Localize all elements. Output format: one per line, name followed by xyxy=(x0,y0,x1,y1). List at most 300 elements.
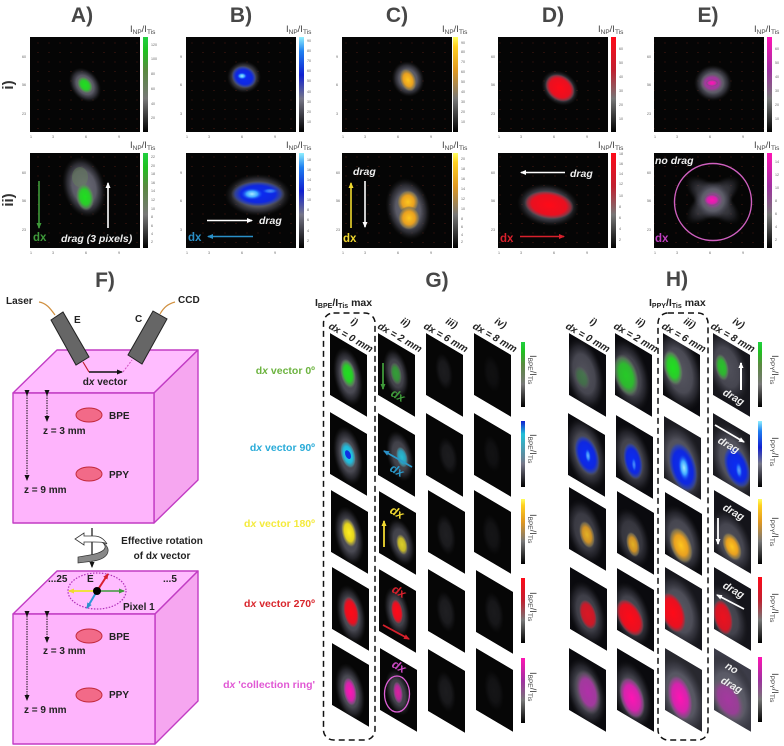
label: E: E xyxy=(87,574,94,585)
colorbar G red xyxy=(521,578,525,643)
axis labels: 1 xyxy=(342,251,344,255)
title: panel letter E: E) xyxy=(698,4,718,27)
row label i: i) xyxy=(0,80,17,90)
arrow: drag xyxy=(107,183,109,228)
map G ii 90 deg xyxy=(378,413,415,497)
axis labels: 9 xyxy=(274,251,276,255)
map H ii 90 deg xyxy=(616,415,653,499)
axis labels: 3 xyxy=(676,135,678,139)
axis labels: 1 xyxy=(186,251,188,255)
map G i 180 deg xyxy=(331,490,368,575)
column label H iii: dx = 6 mm xyxy=(660,321,708,355)
colorbar ticks: 20 xyxy=(619,103,623,107)
colorbar ticks: 14 xyxy=(307,178,311,182)
axis labels: 1 xyxy=(498,135,500,139)
blob: red dragged signal xyxy=(514,180,582,230)
axis labels: 1 xyxy=(342,135,344,139)
axis labels: 56 xyxy=(22,83,26,87)
colorbar ticks: 60 xyxy=(619,47,623,51)
colorbar xyxy=(453,37,458,132)
colorbar title H 1: Tis xyxy=(768,376,775,385)
axis labels: 9 xyxy=(586,251,588,255)
colorbar title G 5: Tis xyxy=(526,693,533,702)
column label G iv: iv) xyxy=(492,316,509,332)
map H iii 90 deg xyxy=(664,416,701,500)
colorbar ticks: 2 xyxy=(619,238,621,242)
axis labels: 9 xyxy=(336,55,338,59)
annotation: H iv 270 deg drag xyxy=(717,580,747,609)
annotation: H iv 90 deg drag: drag xyxy=(716,435,742,457)
map H i 90 deg xyxy=(568,413,605,497)
colorbar ticks: 4 xyxy=(775,225,777,229)
colorbar xyxy=(143,153,148,248)
label: drag: drag xyxy=(570,168,593,180)
annotation: H iv no drag xyxy=(719,660,745,697)
map H ii ring xyxy=(617,648,654,732)
colorbar ticks: 30 xyxy=(775,89,779,93)
axis labels: 60 xyxy=(22,55,26,59)
colorbar ticks: 90 xyxy=(461,41,465,45)
axis labels: 56 xyxy=(647,83,651,87)
column label H i: dx = 0 mm xyxy=(564,321,612,355)
map G ii 0 deg xyxy=(378,333,415,417)
label: dx: dx xyxy=(500,233,514,245)
blob: blue signal xyxy=(227,61,261,93)
colorbar ticks: 10 xyxy=(307,120,311,124)
colorbar title C ii: Tis xyxy=(459,145,468,152)
axis labels: 3 xyxy=(336,112,338,116)
label: dx: dx xyxy=(188,232,202,244)
colorbar ticks: 12 xyxy=(151,198,155,202)
colorbar title C ii: /I xyxy=(454,140,459,151)
panel: E ii heat map xyxy=(647,153,779,255)
colorbar title H 3: PPY xyxy=(768,520,775,533)
axis labels: 6 xyxy=(180,199,182,203)
axis labels: 3 xyxy=(52,251,54,255)
axis labels: 6 xyxy=(241,135,243,139)
colorbar title G 3: /I xyxy=(527,530,538,535)
annotation: G ii 90 deg dx xyxy=(384,451,412,481)
colorbar title H 1: PPY xyxy=(768,358,775,371)
axis labels: 9 xyxy=(430,135,432,139)
axis labels: 6 xyxy=(85,251,87,255)
colorbar title E i: Tis xyxy=(771,29,780,36)
axis labels xyxy=(491,171,588,255)
colorbar title D ii: NP xyxy=(601,145,610,152)
probe E xyxy=(51,312,89,365)
colorbar title H 3: /I xyxy=(769,533,780,538)
colorbar H magenta xyxy=(758,657,762,722)
map G iii 270 deg xyxy=(428,569,465,653)
heading: IPPY/ITis max: PPY xyxy=(652,303,666,310)
map H i 0 deg xyxy=(569,333,606,417)
axis labels: 56 xyxy=(336,199,340,203)
colorbar ticks: 20 xyxy=(461,110,465,114)
axis labels: 3 xyxy=(364,135,366,139)
colorbar ticks: 12 xyxy=(619,182,623,186)
axis labels: 23 xyxy=(22,112,26,116)
label: z = 3 mm: z = 3 mm xyxy=(43,426,86,437)
colorbar ticks: 30 xyxy=(461,100,465,104)
colorbar ticks: 6 xyxy=(461,225,463,229)
axis labels: 60 xyxy=(491,55,495,59)
nanoparticle: PPY xyxy=(76,467,102,481)
axis labels: 1 xyxy=(30,251,32,255)
blob: green dragged signal xyxy=(56,152,112,222)
arrow: drag xyxy=(207,220,252,222)
colorbar ticks: 20 xyxy=(307,110,311,114)
colorbar xyxy=(767,153,772,248)
arrow: dx xyxy=(38,181,40,228)
colorbar title G 5: I xyxy=(527,672,538,675)
label: Laser: Laser xyxy=(6,296,33,307)
colorbar ticks: 60 xyxy=(461,70,465,74)
arrow: dx xyxy=(350,183,352,228)
colorbar ticks: 6 xyxy=(619,216,621,220)
axis labels xyxy=(491,55,588,139)
colorbar title D ii: /I xyxy=(610,140,615,151)
annotation: G ii ring dx: dx xyxy=(389,657,410,677)
annotation: H iv 180 deg drag xyxy=(718,502,747,544)
axis labels: 6 xyxy=(553,135,555,139)
colorbar H red xyxy=(758,577,762,643)
axis labels xyxy=(336,171,432,255)
map G iv 0 deg xyxy=(474,333,511,417)
colorbar ticks: 20 xyxy=(775,103,779,107)
panel: D i heat map xyxy=(491,37,623,139)
map H ii 0 deg xyxy=(615,333,652,417)
panel: D ii heat map xyxy=(491,152,623,255)
depth arrow: z 3 mm xyxy=(46,395,48,421)
colorbar ticks: 90 xyxy=(307,39,311,43)
column label G iv: dx = 8 mm xyxy=(470,321,519,355)
colorbar title B ii: NP xyxy=(289,145,298,152)
colorbar title E i: /I xyxy=(766,24,771,35)
colorbar title A i: Tis xyxy=(147,29,156,36)
colorbar ticks: 12 xyxy=(775,173,779,177)
heading: IPPY/ITis max: max xyxy=(682,297,706,309)
colorbar title H 5: /I xyxy=(769,689,780,694)
axis labels: 1 xyxy=(498,251,500,255)
column label G i: i) xyxy=(348,316,360,329)
colorbar ticks xyxy=(307,158,311,243)
ray: laser path xyxy=(83,362,89,372)
axis labels: 56 xyxy=(647,199,651,203)
colorbar ticks: 4 xyxy=(307,229,309,233)
colorbar ticks: 8 xyxy=(461,217,463,221)
axis labels: 60 xyxy=(336,171,340,175)
title: panel letter B: B) xyxy=(230,4,252,27)
arrow: dx xyxy=(520,236,564,238)
colorbar ticks: 10 xyxy=(619,194,623,198)
colorbar ticks: 20 xyxy=(461,157,465,161)
axis labels: 9 xyxy=(430,251,432,255)
map H iii 270 deg xyxy=(665,567,702,651)
panel: C ii heat map xyxy=(336,153,465,255)
colorbar title B i: /I xyxy=(298,24,303,35)
map H iv 180 deg xyxy=(714,490,751,574)
annotation: G ii 90 deg dx: dx xyxy=(387,461,408,481)
map H iii ring xyxy=(665,648,702,732)
axis labels xyxy=(647,171,744,255)
colorbar ticks: 12 xyxy=(307,188,311,192)
annotation: H iv 270 deg drag: drag xyxy=(721,580,747,602)
panel F: experiment diagram xyxy=(6,269,203,744)
colorbar title D i: Tis xyxy=(615,29,624,36)
axis labels xyxy=(647,55,744,139)
colorbar title C i: Tis xyxy=(459,29,468,36)
annotation: H iv 0 deg drag xyxy=(721,363,747,409)
map G i 270 deg xyxy=(332,567,369,653)
pixel collection ring xyxy=(68,573,126,609)
axis labels: 3 xyxy=(520,251,522,255)
panel: C i heat map xyxy=(336,37,465,139)
nanoparticle: BPE xyxy=(76,629,102,643)
colorbar ticks: 8 xyxy=(619,205,621,209)
map G ii ring xyxy=(380,648,417,732)
colorbar ticks: 80 xyxy=(307,49,311,53)
title: panel letter C: C) xyxy=(386,4,408,27)
axis labels: 56 xyxy=(491,83,495,87)
label: dx vector: dx vector xyxy=(83,377,127,388)
colorbar title G 1: /I xyxy=(527,371,538,376)
axis labels: 3 xyxy=(180,228,182,232)
map G iii 0 deg xyxy=(426,333,463,417)
colorbar ticks: 8 xyxy=(307,208,309,212)
heading: IBPE/ITis max: Tis xyxy=(338,303,348,310)
colorbar title D ii: Tis xyxy=(615,145,624,152)
column label H iv: dx = 8 mm xyxy=(708,321,757,355)
colorbar ticks: 16 xyxy=(461,177,465,181)
colorbar title B i: NP xyxy=(289,29,298,36)
column label H ii: dx = 2 mm xyxy=(612,321,660,355)
map G ii 180 deg xyxy=(379,491,416,575)
label: PPY: PPY xyxy=(109,470,129,481)
axis labels: 6 xyxy=(553,251,555,255)
colorbar ticks xyxy=(775,160,779,242)
label: pixel 25: ...25 xyxy=(48,574,68,585)
heading: IPPY/ITis max: I xyxy=(649,297,652,309)
row label: dx collection ring: dx 'collection ring' xyxy=(223,679,315,691)
map G iv 270 deg xyxy=(476,570,513,654)
colorbar title G 3: BPE xyxy=(526,517,533,530)
colorbar title A ii: I xyxy=(130,140,133,151)
colorbar ticks xyxy=(461,157,465,244)
colorbar title C i: /I xyxy=(454,24,459,35)
map G iv 180 deg xyxy=(474,490,511,574)
dashed highlight: G column i xyxy=(324,313,375,740)
colorbar title E ii: I xyxy=(754,140,757,151)
colorbar title H 4: /I xyxy=(769,609,780,614)
colorbar title H 4: I xyxy=(769,593,780,596)
colorbar title G 3: I xyxy=(527,514,538,517)
annotation: H iv 180 deg drag: drag xyxy=(721,502,747,524)
dashed highlight: H column iii xyxy=(658,313,708,740)
colorbar title E i: NP xyxy=(757,29,766,36)
colorbar title H 2: Tis xyxy=(768,458,775,467)
colorbar ticks: 10 xyxy=(775,117,779,121)
fibre: CCD xyxy=(160,302,175,314)
colorbar title G 4: I xyxy=(527,592,538,595)
colorbar G magenta xyxy=(521,658,525,723)
axis labels: 9 xyxy=(118,135,120,139)
colorbar title H 4: Tis xyxy=(768,614,775,623)
heading F: F) xyxy=(95,269,115,292)
map H iv ring xyxy=(714,648,751,732)
axis labels: 9 xyxy=(742,251,744,255)
colorbar xyxy=(767,37,772,132)
label: z = 3 mm: z = 3 mm xyxy=(43,646,86,657)
colorbar xyxy=(611,153,616,248)
colorbar ticks xyxy=(619,47,623,121)
colorbar title B ii: I xyxy=(286,140,289,151)
colorbar title H 4: PPY xyxy=(768,596,775,609)
source point xyxy=(93,587,101,595)
heading H: H) xyxy=(666,268,688,291)
colorbar title G 2: BPE xyxy=(526,437,533,450)
colorbar ticks: 8 xyxy=(151,215,153,219)
map G iv 90 deg xyxy=(474,413,511,497)
colorbar ticks: 16 xyxy=(151,181,155,185)
title: panel letter D: D) xyxy=(542,4,564,27)
label: E: E xyxy=(74,315,81,326)
colorbar title G 2: /I xyxy=(527,450,538,455)
axis labels: 6 xyxy=(180,83,182,87)
label: CCD: CCD xyxy=(178,295,200,306)
axis labels: 56 xyxy=(22,199,26,203)
colorbar ticks: 120 xyxy=(151,43,157,47)
colorbar G green xyxy=(521,342,525,407)
colorbar title H 5: Tis xyxy=(768,694,775,703)
map G iii 180 deg xyxy=(428,490,465,574)
colorbar ticks: 8 xyxy=(775,199,777,203)
heading: IBPE/ITis max: /I xyxy=(332,297,338,309)
colorbar ticks: 12 xyxy=(461,197,465,201)
title: panel letter A: A) xyxy=(71,4,93,27)
map H iii 0 deg xyxy=(663,333,700,417)
colorbar ticks: 50 xyxy=(461,80,465,84)
row label: dx vector 90: dx vector 90º xyxy=(250,442,315,454)
axis labels: 6 xyxy=(397,135,399,139)
depth arrow: z 9 mm xyxy=(26,395,28,480)
heading: IPPY/ITis max: Tis xyxy=(672,303,682,310)
heading: IBPE/ITis max: BPE xyxy=(318,303,333,310)
label: drag: drag xyxy=(353,166,376,178)
blob: orange dragged signal xyxy=(380,174,436,244)
colorbar title H 3: Tis xyxy=(768,538,775,547)
axis labels: 3 xyxy=(52,135,54,139)
arrow: drag xyxy=(521,172,565,174)
colorbar xyxy=(453,153,458,248)
label: PPY: PPY xyxy=(109,690,129,701)
arrow: yellow dx xyxy=(69,590,97,592)
annotation: G ii 270 deg dx: dx xyxy=(389,582,410,602)
arrow: dx vector xyxy=(89,371,122,373)
colorbar H green xyxy=(758,342,762,407)
colorbar ticks: 14 xyxy=(619,172,623,176)
colorbar ticks: 70 xyxy=(461,60,465,64)
colorbar xyxy=(299,37,304,132)
axis labels: 3 xyxy=(520,135,522,139)
map G i 90 deg xyxy=(330,412,367,496)
axis labels: 9 xyxy=(274,135,276,139)
colorbar ticks: 6 xyxy=(151,224,153,228)
axis labels xyxy=(22,55,120,139)
map H iii 180 deg xyxy=(665,492,702,576)
annotation: H iv 0 deg drag: drag xyxy=(721,387,747,409)
colorbar ticks: 14 xyxy=(461,187,465,191)
colorbar ticks: 50 xyxy=(775,61,779,65)
label: drag: drag xyxy=(259,215,282,227)
colorbar ticks: 14 xyxy=(775,160,779,164)
cube 2 xyxy=(13,571,198,744)
colorbar ticks: 22 xyxy=(151,155,155,159)
colorbar title A i: /I xyxy=(142,24,147,35)
colorbar ticks: 2 xyxy=(461,240,463,244)
colorbar title D i: NP xyxy=(601,29,610,36)
axis labels: 23 xyxy=(647,228,651,232)
colorbar title H 3: I xyxy=(769,517,780,520)
axis labels: 9 xyxy=(180,171,182,175)
column label H ii: ii) xyxy=(634,316,647,330)
colorbar title D i: /I xyxy=(610,24,615,35)
colorbar title G 2: I xyxy=(527,434,538,437)
column label G ii: dx = 2 mm xyxy=(376,321,424,355)
axis labels: 3 xyxy=(180,112,182,116)
map H iv 90 deg xyxy=(713,413,750,497)
colorbar ticks: 2 xyxy=(307,239,309,243)
label: C: C xyxy=(135,314,142,325)
blob: red signal xyxy=(534,63,586,113)
axis labels: 1 xyxy=(186,135,188,139)
colorbar ticks: 60 xyxy=(151,87,155,91)
colorbar title G 4: Tis xyxy=(526,613,533,622)
axis labels xyxy=(180,55,276,139)
colorbar ticks: 2 xyxy=(151,240,153,244)
colorbar title G 4: BPE xyxy=(526,595,533,608)
colorbar ticks: 60 xyxy=(775,47,779,51)
colorbar ticks: 10 xyxy=(619,117,623,121)
blob: magenta no-drag signal xyxy=(678,167,748,233)
arrow: drag xyxy=(364,181,366,227)
axis labels: 23 xyxy=(491,228,495,232)
axis labels xyxy=(180,171,276,255)
axis labels: 23 xyxy=(22,228,26,232)
colorbar ticks: 10 xyxy=(461,120,465,124)
colorbar ticks: 6 xyxy=(307,218,309,222)
axis labels: 3 xyxy=(364,251,366,255)
axis labels: 60 xyxy=(22,171,26,175)
axis labels: 23 xyxy=(491,112,495,116)
colorbar ticks: 10 xyxy=(151,207,155,211)
map G iii ring xyxy=(428,649,465,733)
depth arrow: z 3 mm xyxy=(46,616,48,642)
panel: B i heat map xyxy=(180,37,311,139)
panel: A i heat map xyxy=(22,37,157,139)
colorbar xyxy=(611,37,616,132)
colorbar title A i: I xyxy=(130,24,133,35)
map G iii 90 deg xyxy=(426,413,463,497)
panel: B ii heat map xyxy=(180,153,311,255)
colorbar ticks: 16 xyxy=(619,162,623,166)
colorbar title G 1: Tis xyxy=(526,376,533,385)
axis labels: 3 xyxy=(208,135,210,139)
panel: E i heat map xyxy=(647,37,779,139)
row label: dx vector 0: dx vector 0º xyxy=(256,365,315,377)
map G ii 270 deg xyxy=(379,569,416,653)
colorbar ticks: 20 xyxy=(151,164,155,168)
map H iv 0 deg xyxy=(713,333,750,417)
